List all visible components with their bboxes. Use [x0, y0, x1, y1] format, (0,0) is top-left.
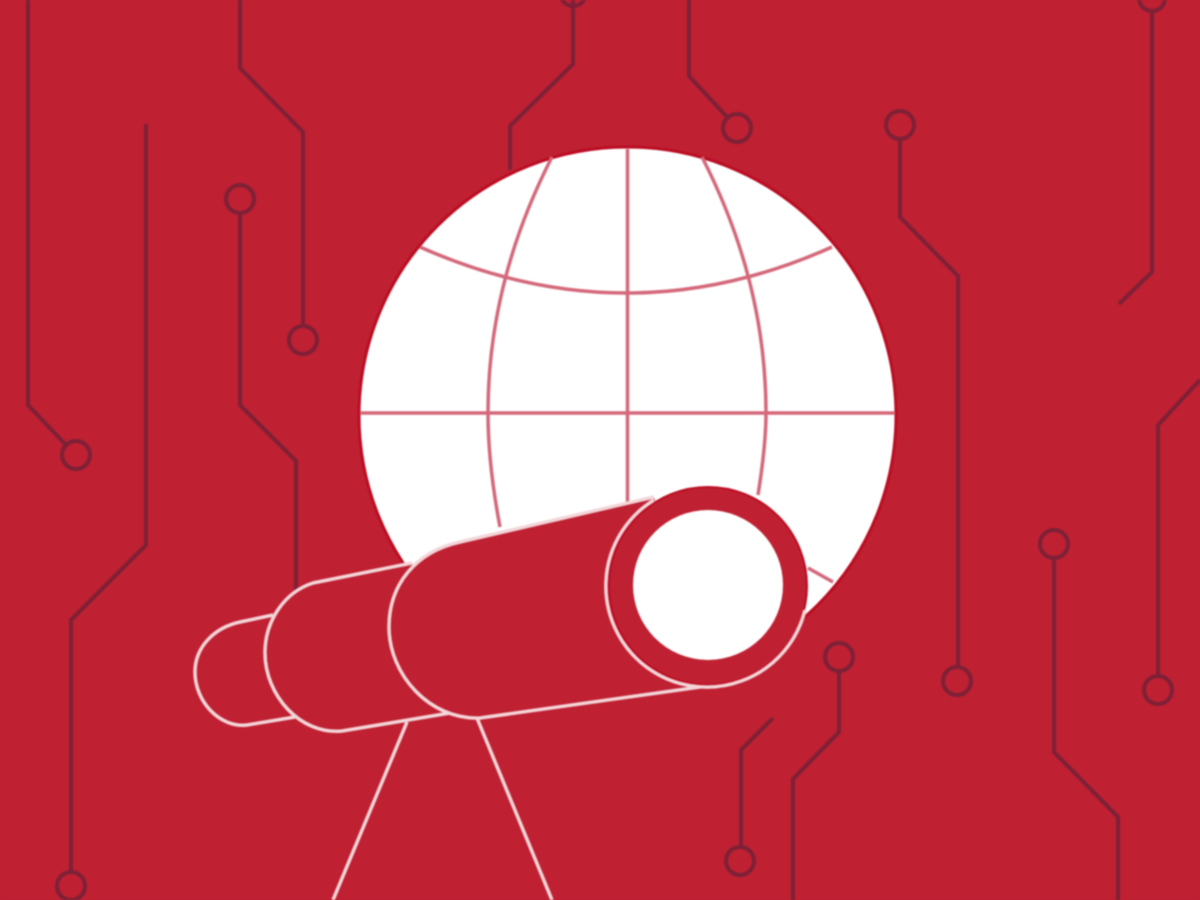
telescope eyepiece section: [195, 615, 295, 725]
telescope middle section: [265, 563, 450, 731]
tripod legs: [333, 718, 552, 900]
telescope lens: [606, 487, 807, 687]
icon: globe: [359, 147, 896, 684]
icon: telescope: [195, 487, 807, 900]
telescope main tube: [389, 497, 700, 718]
